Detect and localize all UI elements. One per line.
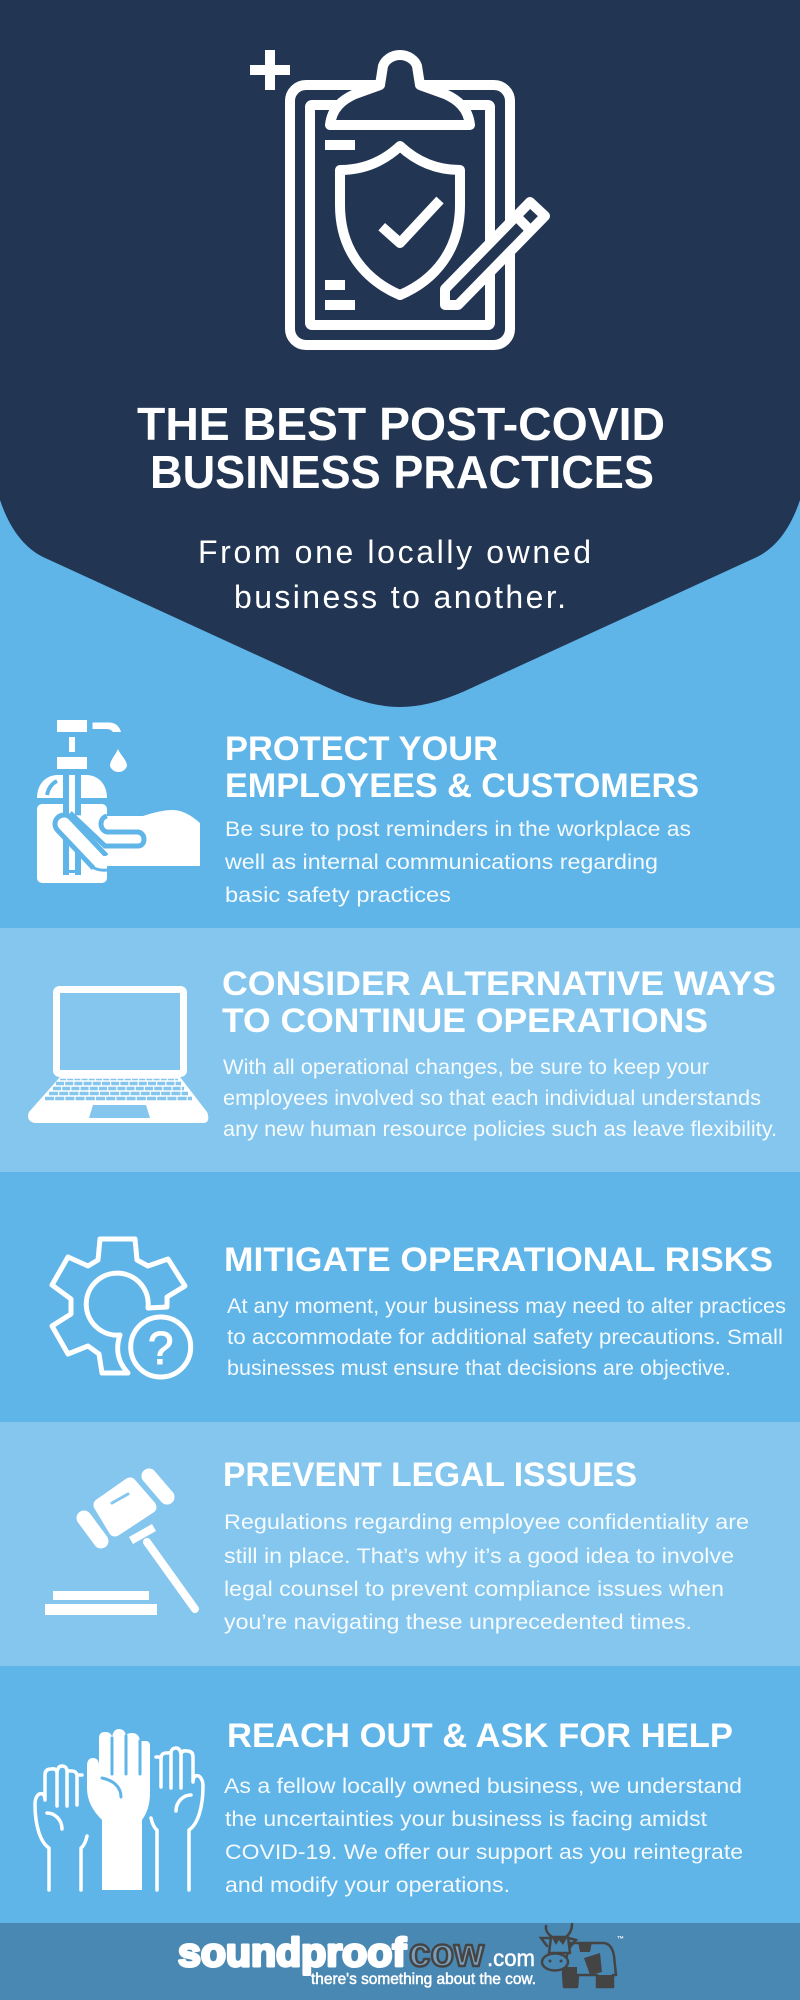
subtitle: business to another. [234,579,566,615]
body text [223,1055,777,1141]
heading: REACH OUT & ASK FOR HELP [227,1717,733,1755]
panel: consider alternative ways [0,928,800,1172]
body text: legal counsel to prevent compliance issues when [224,1577,724,1601]
icon: raised hands [35,1729,203,1890]
icon: clipboard with shield [250,50,545,345]
body text: COVID-19. We offer our support as you reintegrate [225,1840,743,1864]
body text [224,1774,743,1897]
panel: prevent legal issues [0,1422,800,1666]
body text: you’re navigating these unprecedented times. [224,1610,692,1634]
body text: Be sure to post reminders in the workplace as [225,817,691,841]
body text: Regulations regarding employee confidentiality are [224,1510,749,1534]
body text: to accommodate for additional safety precautions. Small [227,1325,783,1349]
heading: PREVENT LEGAL ISSUES [223,1456,637,1494]
logo wordmark: soundproof [178,1931,407,1975]
heading [222,965,776,1040]
heading: MITIGATE OPERATIONAL RISKS [224,1241,773,1279]
heading: PROTECT YOUR [225,730,498,768]
body text [227,1294,786,1380]
footer [0,1923,800,2000]
body text: and modify your operations. [225,1873,510,1897]
icon: gavel [45,1476,195,1615]
panel: mitigate operational risks [0,1172,800,1422]
icon: soap dispenser and hand [37,720,200,883]
body text: employees involved so that each individual understands [223,1086,761,1110]
subtitle: From one locally owned [198,534,591,570]
logo wordmark: .com [487,1945,535,1971]
subtitle [198,534,591,615]
icon: gear with question mark: ? [148,1322,173,1374]
body text: businesses must ensure that decisions are objective. [227,1356,731,1380]
icon: cow mascot: ™ [617,1936,624,1943]
panel: reach out and ask for help [0,1666,800,1923]
title: THE BEST POST-COVID [137,398,665,450]
logo wordmark: cow [409,1931,485,1975]
title [137,398,665,498]
panel: hero banner [0,0,800,707]
body text: At any moment, your business may need to alter practices [227,1294,786,1318]
title: BUSINESS PRACTICES [150,446,654,498]
panel: protect employees and customers [0,710,800,928]
body text: With all operational changes, be sure to keep your [223,1055,709,1079]
body text: well as internal communications regarding [224,850,658,874]
body text: still in place. That’s why it’s a good idea to involve [224,1544,734,1568]
logo wordmark: there's something about the cow. [311,1971,536,1988]
icon: gear with question mark [52,1239,191,1377]
icon: laptop [28,990,208,1123]
body text: any new human resource policies such as leave flexibility. [223,1117,777,1141]
icon: cow mascot [541,1924,624,1987]
body text: the uncertainties your business is facing amidst [225,1807,707,1831]
logo wordmark [178,1931,536,1988]
heading: CONSIDER ALTERNATIVE WAYS [222,965,776,1003]
body text: basic safety practices [225,883,451,907]
heading [225,730,699,805]
heading: EMPLOYEES & CUSTOMERS [225,767,699,805]
heading: TO CONTINUE OPERATIONS [222,1002,708,1040]
body text [224,817,691,907]
body text: As a fellow locally owned business, we understand [224,1774,742,1798]
body text [224,1510,749,1634]
